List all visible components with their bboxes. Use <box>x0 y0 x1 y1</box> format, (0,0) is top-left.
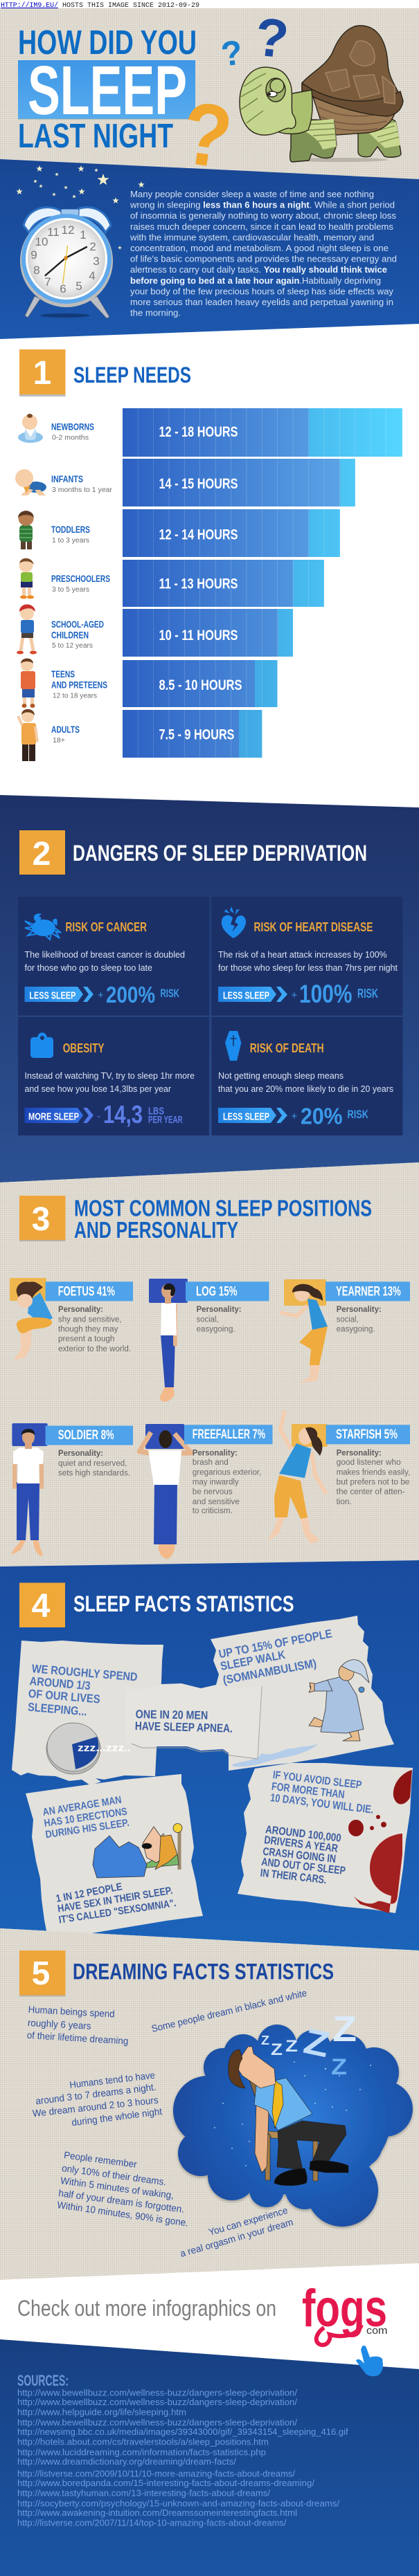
illustration: sparkles <box>214 2061 371 2166</box>
row: school-aged children: SCHOOL-AGED <box>51 619 104 630</box>
row: preschoolers: PRESCHOOLERS <box>51 573 110 584</box>
position: log: LOG 15% <box>196 1284 238 1299</box>
logo: fogs.com: fogs <box>302 2279 387 2338</box>
panel: sources <box>0 2339 419 2576</box>
illustration: floating z letters: Z <box>261 2034 269 2047</box>
row: newborns: NEWBORNS <box>51 421 94 432</box>
callout: less sleep +200% risk: RISK <box>161 987 179 1000</box>
personality text: brash and <box>193 1459 229 1467</box>
illustration: floating z letters: Z <box>271 2040 283 2059</box>
personality text: sets high standards. <box>58 1470 130 1478</box>
icon: stars <box>16 165 145 249</box>
personality text <box>193 1449 261 1515</box>
source list: http://listverse.com/2009/10/11/10-more-amazing-facts-about-dreams/ <box>17 2468 295 2478</box>
card: one third of life: WE ROUGHLY SPEND <box>31 1662 138 1684</box>
callout: more sleep -14,3 lbs per year: MORE SLEEP <box>28 1111 79 1123</box>
card: risk of death: Not getting enough sleep means <box>218 1071 344 1081</box>
text: remembering dreams: People remember <box>63 2149 138 2170</box>
row: school-aged children <box>17 605 104 655</box>
personality text: social, <box>337 1315 359 1324</box>
icon: alarm clock: 8 <box>33 264 40 277</box>
icon: newborn <box>18 414 43 443</box>
icon: alarm clock: 1 <box>80 228 87 241</box>
heading: positions: AND PERSONALITY <box>74 1217 238 1243</box>
illustration: man in bed <box>93 1824 182 1878</box>
intro paragraph: your body of the few precious hours of sleep has side effects way <box>130 286 394 296</box>
positions linen background <box>0 1162 419 1566</box>
card: avoid sleep and drivers: IF YOU AVOID SLEEP <box>272 1769 362 1791</box>
facts background <box>0 1560 419 1951</box>
personality text: makes friends easily, <box>337 1468 410 1477</box>
row: school-aged children: 5 to 12 years <box>52 642 93 650</box>
source list: http://www.awakening-intuition.com/Dreamssomeinterestingfacts.html <box>17 2508 297 2518</box>
illustration: sleepwalker <box>309 1660 369 1741</box>
source list: http://www.luciddreaming.com/information/facts-statistics.php <box>17 2447 266 2457</box>
card: avoid sleep and drivers: AROUND 100,000 <box>265 1824 342 1845</box>
callout: more sleep -14,3 lbs per year: PER YEAR <box>148 1114 183 1126</box>
card: erections and sexsomnia: 1 IN 12 PEOPLE <box>55 1881 123 1905</box>
illustration: floating z letters: Z <box>285 2037 298 2056</box>
heading: sleep facts: SLEEP FACTS STATISTICS <box>73 1591 294 1616</box>
text: six years dreaming: of their lifetime dreaming <box>26 2029 129 2047</box>
text: six years dreaming <box>26 2004 129 2047</box>
bar chart: hours by age: 14 - 15 HOURS <box>159 476 238 492</box>
heading: positions <box>74 1195 372 1243</box>
callout: more sleep -14,3 lbs per year: - <box>97 1111 100 1122</box>
callout: less sleep +100% risk: RISK <box>357 987 378 1001</box>
row: teens and preteens: TEENS <box>51 668 75 679</box>
card: sleep apnea: ONE IN 20 MEN <box>136 1708 208 1722</box>
personality text: exterior to the world. <box>58 1345 131 1353</box>
card: sleep walking: UP TO 15% OF PEOPLE <box>217 1627 333 1661</box>
hosting banner <box>0 0 419 10</box>
personality text <box>58 1450 130 1478</box>
title <box>18 24 197 155</box>
illustration: floating z letters: Z <box>331 2054 347 2079</box>
bar chart: hours by age: 12 - 18 HOURS <box>159 424 238 440</box>
promo background <box>0 2263 419 2369</box>
source list: http://listverse.com/2007/11/14/top-10-amazing-facts-about-dreams/ <box>17 2518 287 2528</box>
text: black and white: Some people dream in black and white <box>150 1987 308 2034</box>
callout: less sleep +100% risk <box>218 980 378 1008</box>
icon: alarm clock: 4 <box>89 269 96 282</box>
card: obesity: OBESITY <box>63 1041 104 1055</box>
intro paragraph: with the immune system, cardiovascular health, memory and <box>130 232 374 242</box>
figure: yearner sleeper <box>280 1279 328 1382</box>
icon: pointing hand <box>356 2346 383 2376</box>
dreaming linen background <box>0 1928 419 2280</box>
personality text: easygoing. <box>197 1325 235 1333</box>
text: six years dreaming: roughly 6 years <box>28 2017 91 2031</box>
personality text: easygoing. <box>337 1325 375 1333</box>
personality text <box>337 1306 382 1333</box>
text: remembering dreams: half of your dream is forgotten. <box>58 2187 185 2215</box>
hosting banner: HOSTS THIS IMAGE SINCE 2012-09-29 <box>62 2 199 10</box>
callout: less sleep +200% risk: + <box>98 989 104 1001</box>
number badge 1: 1 <box>33 355 51 392</box>
card: erections and sexsomnia: AN AVERAGE MAN <box>42 1794 123 1818</box>
card: avoid sleep and drivers: 10 DAYS, YOU WILL DIE. <box>269 1792 374 1816</box>
row: preschoolers <box>19 558 110 599</box>
callout: more sleep -14,3 lbs per year <box>25 1100 183 1129</box>
position: starfish <box>268 1410 410 1544</box>
text: dream orgasm: a real orgasm in your dream <box>179 2216 294 2259</box>
icon: alarm clock: 5 <box>75 280 82 293</box>
card: avoid sleep and drivers <box>238 1763 413 1913</box>
title: SLEEP <box>28 52 187 129</box>
illustration: blood stains <box>348 1770 412 1913</box>
text: remembering dreams: Within 5 minutes of waking, <box>60 2175 175 2201</box>
icon: orange question mark: ? <box>176 83 238 188</box>
source list: http://hotels.about.com/cs/travelerstools/a/sleep_positions.htm <box>17 2437 269 2447</box>
bar chart: hours by age: 8.5 - 10 HOURS <box>159 677 242 693</box>
callout: less sleep +100% risk: + <box>291 989 298 1001</box>
personality text: Personality: <box>193 1449 238 1457</box>
header linen background <box>0 8 419 181</box>
icon: toddler <box>18 511 34 549</box>
panel: dreaming facts <box>0 1928 419 2280</box>
row: teens and preteens <box>21 659 107 708</box>
callout: less sleep +200% risk: 200% <box>106 982 155 1007</box>
intro paragraph: concentration, mood and metabolism. A good night sleep is one <box>130 243 389 253</box>
card: erections and sexsomnia: DURING HIS SLEEP. <box>45 1817 130 1840</box>
source list: http://socyberty.com/psychology/15-unknown-and-amazing-facts-about-dreams/ <box>17 2498 339 2508</box>
callout: less sleep +100% risk: 100% <box>299 980 352 1008</box>
personality text: though they may <box>58 1325 118 1333</box>
card: sleep apnea <box>125 1683 262 1759</box>
text: dreams a night: We dream around 2 to 3 hours <box>32 2094 159 2119</box>
row: toddlers <box>18 511 90 549</box>
text: remembering dreams: only 10% of their dreams. <box>61 2162 167 2187</box>
icon: alarm clock: 3 <box>93 255 100 268</box>
icon: alarm clock: 10 <box>35 235 48 248</box>
text: dreams a night <box>32 2070 163 2128</box>
card: risk of death <box>212 1017 403 1135</box>
pie chart: one third <box>46 1723 100 1774</box>
card: risk of heart disease: RISK OF HEART DISEASE <box>253 920 373 934</box>
row: toddlers: TODDLERS <box>51 524 90 535</box>
illustration: floating z letters <box>261 2009 357 2079</box>
figure: starfish sleeper <box>268 1410 328 1544</box>
personality text: may inwardly <box>193 1478 239 1486</box>
bar chart: hours by age: 12 - 14 HOURS <box>159 527 238 543</box>
card: risk of heart disease: for those who sleep for less than 7hrs per night <box>218 963 398 973</box>
card: risk of cancer: for those who go to sleep too late <box>25 963 152 973</box>
number badge 5: 5 <box>32 1955 50 1992</box>
illustration: man sleeping on chair <box>229 2047 348 2186</box>
icon: alarm clock: 12 <box>62 223 74 237</box>
bar chart: hours by age: 10 - 11 HOURS <box>159 628 238 643</box>
card: avoid sleep and drivers: DRIVERS A YEAR <box>264 1834 339 1855</box>
number badge 3: 3 <box>32 1201 50 1238</box>
source list <box>17 2387 348 2528</box>
personality text: be nervous <box>193 1488 233 1497</box>
icon: alarm clock: 9 <box>30 248 37 262</box>
card: obesity: Instead of watching TV, try to sleep 1hr more <box>25 1071 195 1081</box>
text: dreams a night: during the whole night <box>71 2105 163 2128</box>
card: erections and sexsomnia: HAVE SEX IN THEIR SLEEP. <box>57 1885 173 1915</box>
card: avoid sleep and drivers: CRASH GOING IN <box>262 1846 337 1865</box>
intro paragraph <box>130 189 397 318</box>
intro paragraph: Many people consider sleep a waste of time and see nothing <box>130 189 374 199</box>
callout: less sleep +20% risk: 20% <box>301 1103 343 1129</box>
intro paragraph: wrong in sleeping less than 6 hours a night. While a short period <box>130 200 395 210</box>
number badge 2 <box>19 830 65 875</box>
intro paragraph: before going to bed at a late hour again.Habitually depriving <box>130 275 381 286</box>
source list: http://www.dreamdictionary.org/dreaming/dream-facts/ <box>17 2456 236 2467</box>
panel: sleep facts <box>0 1560 419 1951</box>
icon: alarm clock <box>20 208 113 318</box>
icon: alarm clock: 7 <box>44 275 51 289</box>
bar chart: hours by age: 11 - 13 HOURS <box>159 576 238 592</box>
call to action text: Check out more infographics on <box>17 2296 276 2321</box>
icon: teen <box>21 659 35 708</box>
card: risk of cancer <box>18 897 209 1016</box>
figure: foetus sleeper <box>10 1278 53 1360</box>
personality text: and sensitive <box>193 1498 240 1506</box>
card: risk of cancer: The likelihood of breast cancer is doubled <box>25 950 185 960</box>
personality text: tion. <box>337 1498 352 1506</box>
callout: more sleep -14,3 lbs per year: LBS <box>148 1106 164 1117</box>
personality text: Personality: <box>337 1449 382 1457</box>
callout: less sleep +20% risk: LESS SLEEP <box>223 1111 269 1123</box>
personality text: Personality: <box>58 1450 103 1458</box>
row: infants: 3 months to 1 year <box>52 486 113 494</box>
bar chart: hours by age <box>123 408 402 758</box>
icon: school child <box>17 605 37 655</box>
personality text: quiet and reserved, <box>58 1459 127 1468</box>
card: one third of life: AROUND 1/3 <box>29 1674 91 1692</box>
callout: less sleep +20% risk: + <box>291 1111 298 1122</box>
intro paragraph: of life's basic components and provides the necessary energy and <box>130 254 397 264</box>
text: remembering dreams <box>57 2149 189 2229</box>
row: infants <box>15 469 113 495</box>
card: sleep apnea: HAVE SLEEP APNEA. <box>135 1719 233 1735</box>
card: risk of heart disease <box>212 897 403 1016</box>
hosting banner: HTTP://IM9.EU/ <box>1 1 58 10</box>
intro paragraph: raises much deeper concern, since it can lead to health problems <box>130 221 393 232</box>
icon: alarm clock: 6 <box>60 282 66 295</box>
icon: preschooler <box>19 558 34 599</box>
personality text: Personality: <box>197 1306 242 1314</box>
intro paragraph: more serious than leaden heavy eyelids and perpetual yawning in <box>130 297 393 307</box>
card: risk of heart disease: The risk of a heart attack increases by 100% <box>218 950 387 960</box>
callout: more sleep -14,3 lbs per year: 14,3 <box>103 1100 143 1129</box>
illustration: tired turtle <box>240 26 403 162</box>
card: one third of life: OF OUR LIVES <box>28 1687 100 1706</box>
number badge 4 <box>19 1583 65 1627</box>
text: dream orgasm: You can experience <box>207 2204 289 2238</box>
card: risk of cancer: RISK OF CANCER <box>65 920 147 934</box>
icon: infant <box>15 469 46 495</box>
personality text: present a tough <box>58 1335 114 1344</box>
card: sleep walking: (SOMNAMBULISM) <box>222 1656 317 1687</box>
row: teens and preteens: 12 to 18 years <box>53 693 97 700</box>
text: remembering dreams: Within 10 minutes, 90% is gone. <box>57 2199 189 2229</box>
row: adults: 18+ <box>53 737 65 745</box>
position: soldier: SOLDIER 8% <box>58 1428 114 1443</box>
personality text: Personality: <box>58 1306 103 1314</box>
icon: large dark question mark: ? <box>252 6 292 70</box>
personality text: Personality: <box>337 1306 382 1314</box>
source list: http://www.bewellbuzz.com/wellness-buzz/dangers-sleep-deprivation/ <box>17 2387 297 2397</box>
position: freefaller <box>139 1424 273 1559</box>
panel: header <box>0 6 419 188</box>
intro paragraph: the morning. <box>130 308 181 318</box>
text: six years dreaming: Human beings spend <box>28 2004 115 2020</box>
source list: http://www.boredpanda.com/15-interesting-facts-about-dreams-dreaming/ <box>17 2478 314 2488</box>
icon: crab <box>25 913 61 940</box>
icon: adult <box>18 709 37 761</box>
zzz label: zzz...zzz.. <box>78 1742 131 1754</box>
card: erections and sexsomnia <box>26 1774 203 1938</box>
panel: dangers of sleep deprivation <box>0 795 419 1182</box>
icon: alarm clock: 11 <box>47 226 60 239</box>
text: dreams a night: Humans tend to have <box>69 2070 156 2090</box>
panel: sleep needs <box>15 349 402 761</box>
panel: sleep positions <box>0 1162 419 1566</box>
position: yearner <box>280 1279 410 1382</box>
panel: footer promo <box>0 2263 419 2369</box>
number badge 1 <box>19 349 65 396</box>
card: one third of life <box>12 1641 163 1785</box>
figure: freefaller sleeper <box>139 1424 191 1559</box>
callout: less sleep +100% risk: LESS SLEEP <box>223 989 269 1002</box>
personality text <box>197 1306 242 1333</box>
row: school-aged children: CHILDREN <box>51 630 89 641</box>
row: toddlers: 1 to 3 years <box>52 537 89 545</box>
intro background <box>0 159 419 339</box>
card: sleep walking: SLEEP WALK <box>220 1648 287 1673</box>
figure: soldier sleeper <box>12 1423 48 1556</box>
card: risk of death: RISK OF DEATH <box>250 1041 324 1055</box>
number badge 4: 4 <box>32 1588 51 1625</box>
number badge 5 <box>19 1951 65 1997</box>
icon: coffin <box>225 1031 241 1061</box>
personality text: social, <box>197 1315 219 1324</box>
callout: less sleep +20% risk <box>218 1103 369 1129</box>
illustration: dream cloud <box>173 2025 413 2227</box>
row: adults <box>18 709 80 761</box>
icon: alarm clock: 2 <box>89 240 96 253</box>
position: freefaller: FREEFALLER 7% <box>193 1427 265 1442</box>
figure: log sleeper <box>149 1279 188 1402</box>
personality text: good listener who <box>337 1459 401 1467</box>
card: erections and sexsomnia: IT'S CALLED "SEXSOMNIA". <box>58 1897 177 1926</box>
icon: weighing scale <box>30 1032 53 1058</box>
logo: fogs.com: com <box>366 2325 388 2337</box>
dangers background <box>0 795 419 1182</box>
card: avoid sleep and drivers: IN THEIR CARS. <box>260 1867 327 1886</box>
row: teens and preteens: AND PRETEENS <box>51 679 107 691</box>
heading: sleep needs: SLEEP NEEDS <box>73 363 191 387</box>
callout: less sleep +20% risk: RISK <box>348 1108 369 1121</box>
position: foetus <box>10 1278 133 1360</box>
callout: less sleep +200% risk <box>25 982 179 1007</box>
card: sleep walking <box>211 1616 394 1771</box>
position: log <box>149 1279 269 1402</box>
card: obesity <box>18 1017 209 1135</box>
row: preschoolers: 3 to 5 years <box>52 586 89 594</box>
callout: less sleep +200% risk: LESS SLEEP <box>29 989 75 1002</box>
panel: intro <box>0 159 419 339</box>
title: HOW DID YOU <box>18 24 197 62</box>
bar chart: hours by age: 7.5 - 9 HOURS <box>159 727 234 743</box>
card: obesity: and see how you lose 14,3lbs per year <box>25 1084 171 1094</box>
text: dreams a night: around 3 to 7 dreams a night. <box>35 2081 157 2106</box>
card: avoid sleep and drivers: FOR MORE THAN <box>271 1781 345 1801</box>
heading: dreaming facts: DREAMING FACTS STATISTICS <box>73 1959 334 1984</box>
intro paragraph: alertness to carry out daily tasks. You really should think twice <box>130 264 387 275</box>
source list: http://www.helpguide.org/life/sleeping.htm <box>17 2407 186 2418</box>
icon: small blue question mark: ? <box>219 33 245 74</box>
card: erections and sexsomnia: HAS 10 ERECTIONS <box>44 1806 128 1829</box>
personality text: but prefers not to be <box>337 1478 409 1486</box>
personality text: the center of atten- <box>337 1488 405 1497</box>
sources background <box>0 2339 419 2576</box>
position: soldier <box>12 1423 133 1556</box>
intro paragraph: of insomnia is generally nothing to worry about, chronic sleep loss <box>130 210 396 221</box>
illustration: floating z letters: Z <box>301 2021 333 2065</box>
personality text <box>337 1449 410 1506</box>
number badge 2: 2 <box>33 836 51 873</box>
card: risk of death: that you are 20% more likely to die in 20 years <box>218 1084 393 1094</box>
number badge 3 <box>19 1196 65 1241</box>
title: LAST NIGHT <box>18 118 173 155</box>
illustration: floating z letters: Z <box>332 2009 357 2049</box>
position: foetus: FOETUS 41% <box>58 1284 115 1299</box>
personality text: to criticism. <box>193 1507 233 1515</box>
row: infants: INFANTS <box>51 473 83 484</box>
card: one third of life: SLEEPING... <box>27 1701 87 1719</box>
source list: http://www.bewellbuzz.com/wellness-buzz/dangers-sleep-deprivation/ <box>17 2397 297 2407</box>
row: newborns <box>18 414 94 443</box>
personality text: shy and sensitive, <box>58 1315 122 1324</box>
row: newborns: 0-2 months <box>52 435 89 441</box>
row: adults: ADULTS <box>51 724 80 735</box>
personality text <box>58 1306 131 1353</box>
source list: http://www.bewellbuzz.com/wellness-buzz/dangers-sleep-deprivation/ <box>17 2417 297 2427</box>
card: avoid sleep and drivers: AND OUT OF SLEEP <box>261 1856 346 1877</box>
personality text: gregarious exterior, <box>193 1468 261 1477</box>
sources heading: SOURCES: <box>17 2372 69 2389</box>
source list: http://newsimg.bbc.co.uk/media/images/39343000/gif/_39343154_sleeping_416.gif <box>17 2427 348 2437</box>
source list: http://www.tastyhuman.com/13-interesting-facts-about-dreams/ <box>17 2488 270 2499</box>
icon: broken heart <box>222 906 246 938</box>
